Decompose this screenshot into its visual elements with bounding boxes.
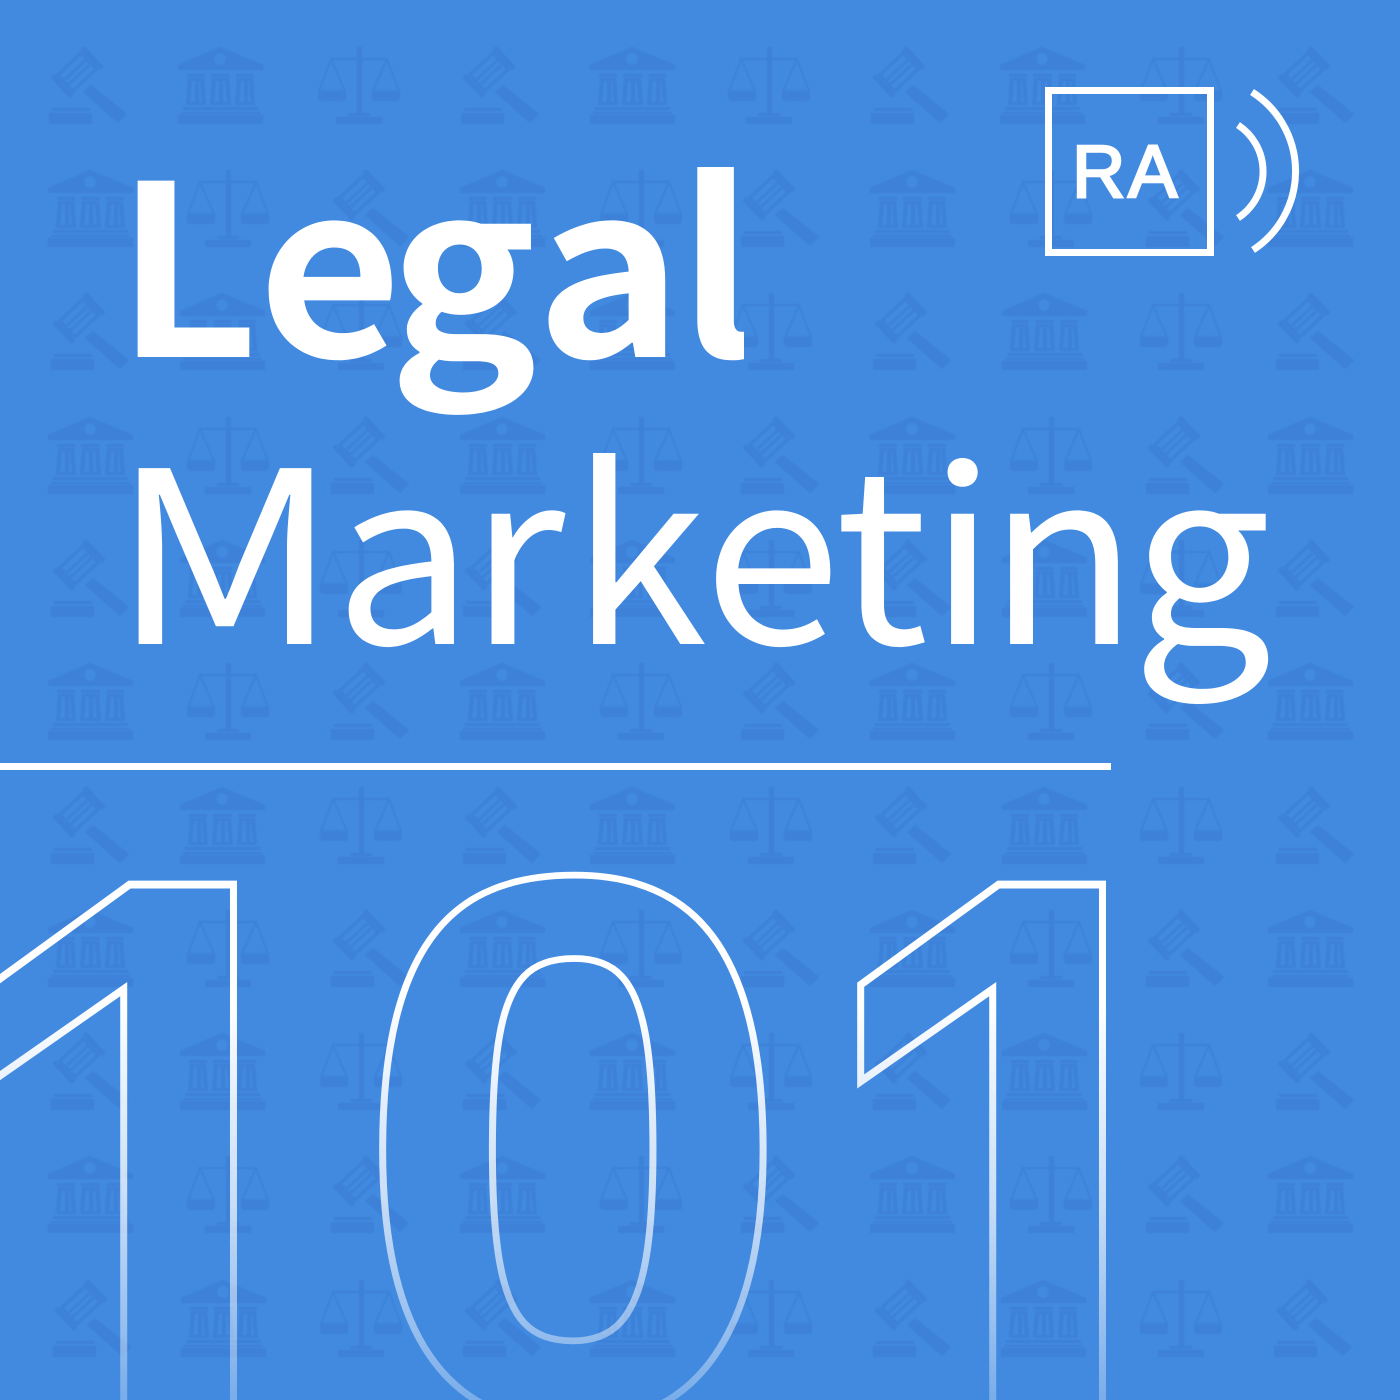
title: Marketing: M xyxy=(110,366,340,713)
title: Legal: Legal xyxy=(115,82,756,426)
logo: RA podcast xyxy=(1048,90,1296,252)
title: Marketing: arketing xyxy=(334,367,1272,714)
divider rule xyxy=(0,763,1111,770)
logo: RA podcast: RA xyxy=(1072,130,1178,213)
outlined numeral 101 xyxy=(0,690,1251,1400)
